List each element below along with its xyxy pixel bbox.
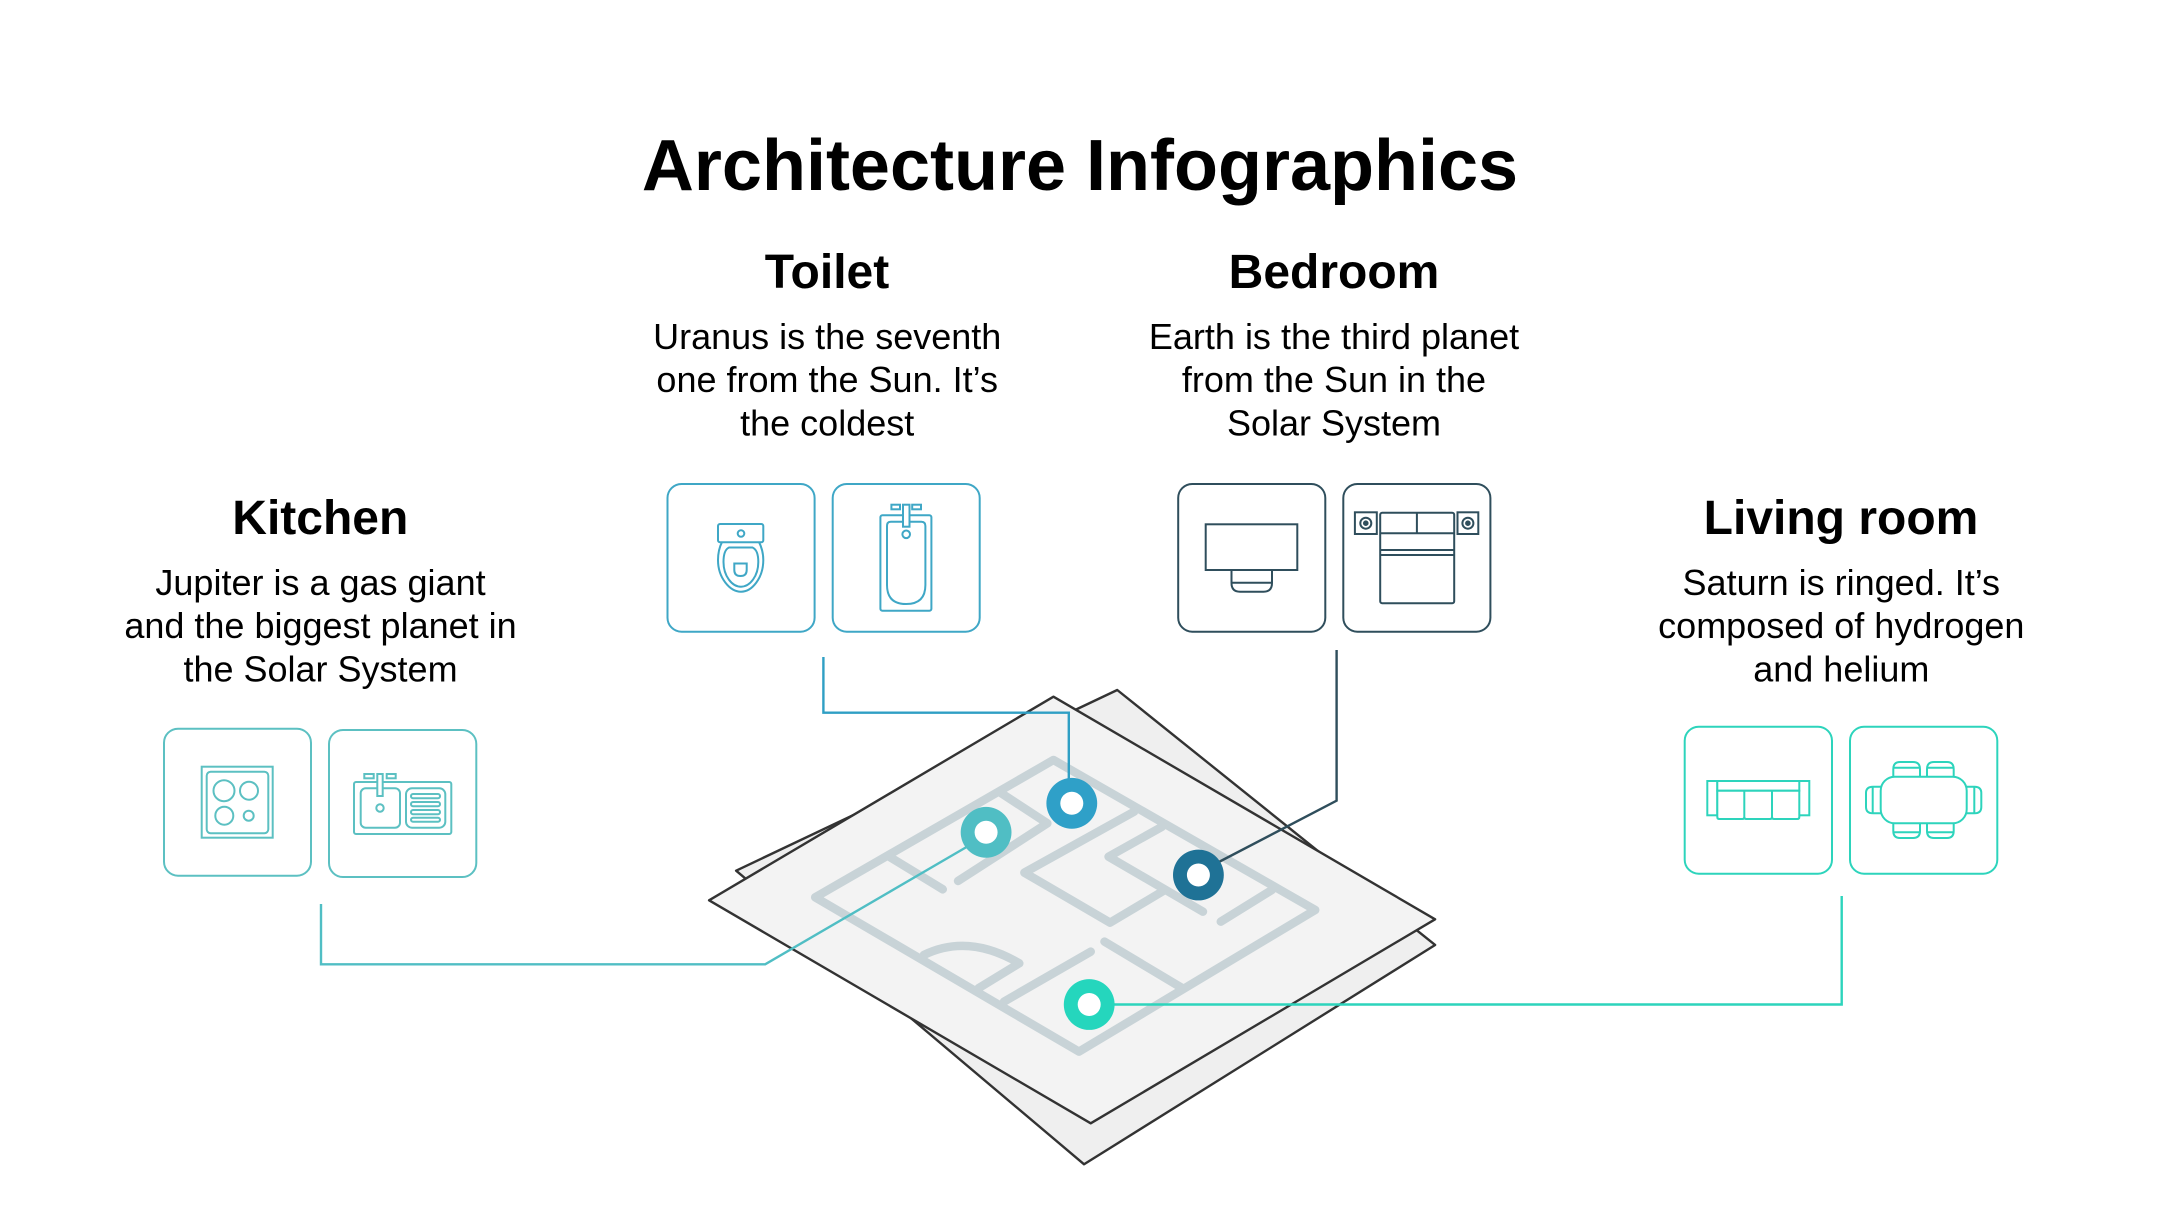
text: kitchen description: Jupiter is a gas giant xyxy=(155,562,486,603)
text: living room description: composed of hydrogen xyxy=(1658,605,2024,646)
icon: desk and chair xyxy=(1178,484,1325,632)
connector: living room xyxy=(1105,896,1842,1004)
title: Architecture Infographics xyxy=(642,126,1518,206)
text: bedroom description: from the Sun in the xyxy=(1182,359,1486,400)
text: living room description: and helium xyxy=(1753,648,1929,690)
panel: living room xyxy=(1658,492,2024,874)
panel: bedroom xyxy=(1149,246,1519,632)
pin: bedroom xyxy=(1173,850,1224,900)
pin: kitchen xyxy=(961,807,1011,858)
text: bedroom description: Earth is the third planet xyxy=(1149,316,1519,357)
text: living room description xyxy=(1658,562,2024,690)
icon: stove xyxy=(164,729,311,876)
panel: toilet xyxy=(653,246,1001,632)
text: bedroom description: Solar System xyxy=(1227,402,1441,444)
text: kitchen description: the Solar System xyxy=(183,648,458,690)
icon: toilet xyxy=(668,484,815,632)
heading: bedroom: Bedroom xyxy=(1229,246,1439,299)
heading: toilet: Toilet xyxy=(765,246,889,299)
heading: kitchen: Kitchen xyxy=(232,492,408,545)
icon: bathtub xyxy=(833,484,980,632)
heading: living room: Living room xyxy=(1704,492,1978,545)
connector: bedroom xyxy=(1215,650,1337,864)
text: bedroom description xyxy=(1149,316,1519,444)
icon: dining table xyxy=(1850,727,1997,874)
pin: toilet xyxy=(1046,778,1097,829)
text: kitchen description: and the biggest planet in xyxy=(124,605,517,646)
floor plan illustration xyxy=(709,690,1435,1164)
connector: toilet xyxy=(823,657,1069,785)
icon: double bed xyxy=(1343,484,1490,632)
text: toilet description: one from the Sun. It’s xyxy=(656,359,998,400)
text: toilet description xyxy=(653,316,1001,444)
icon: sofa xyxy=(1685,727,1832,874)
floor plan walls xyxy=(815,760,1315,1052)
text: kitchen description xyxy=(124,562,517,690)
text: toilet description: the coldest xyxy=(740,402,914,444)
icon: sink xyxy=(329,730,476,877)
pin: living room xyxy=(1064,979,1115,1030)
connector: kitchen xyxy=(321,845,970,964)
text: toilet description: Uranus is the seventh xyxy=(653,316,1001,357)
back sheet xyxy=(736,690,1435,1164)
front sheet xyxy=(709,697,1435,1123)
panel: kitchen xyxy=(124,492,517,877)
text: living room description: Saturn is ringed. It’s xyxy=(1683,562,2000,603)
